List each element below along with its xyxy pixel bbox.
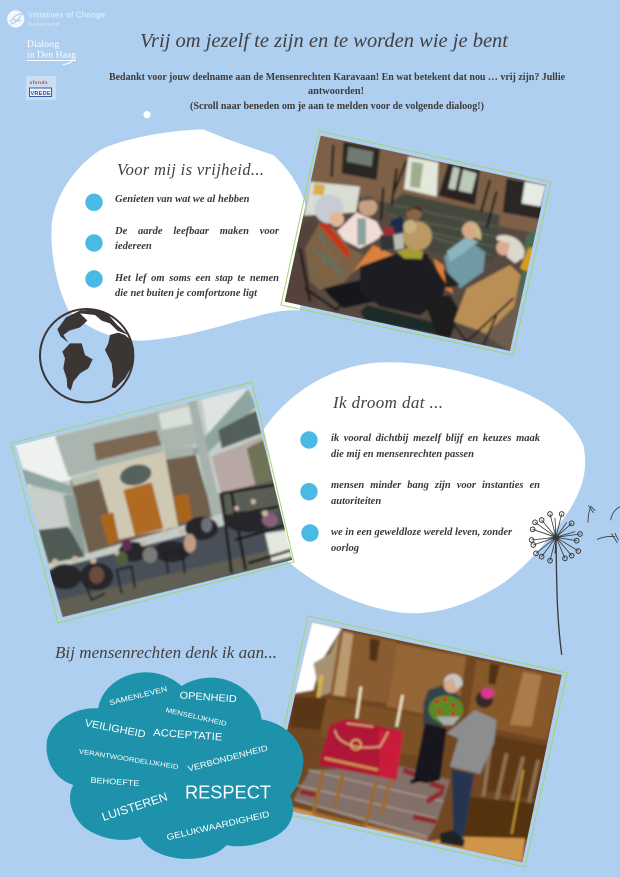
cloud words: ACCEPTATIE [153, 728, 223, 743]
intro text: Bedankt voor jouw deelname aan de Mensenrechten Karavaan! En wat betekent dat nou … vrij zijn? Jullie [109, 72, 566, 83]
cloud words: RESPECT [185, 781, 271, 802]
text block: vrijheid list: die net buiten je comfortzone ligt [115, 288, 257, 299]
intro text: (Scroll naar beneden om je aan te melden voor de volgende dialoog!) [190, 101, 484, 112]
cloud shape [47, 672, 303, 859]
logo: vfonds vrede badge: VREDE [30, 91, 51, 97]
logo: Dialoog in Den Haag: Dialoog [27, 40, 59, 50]
logo: Initiatives of Change: Initiatives of Change [28, 10, 106, 20]
text block: vrijheid list [114, 194, 279, 299]
cloud words: VERANTWOORDELIJKHEID [78, 748, 179, 771]
heading: Voor mij is vrijheid: Voor mij is vrijheid... [117, 160, 264, 179]
word cloud [47, 672, 303, 859]
panel: droom bubble [263, 362, 585, 613]
bullets: vrijheid [85, 194, 103, 288]
icon: globe [40, 309, 134, 402]
icon: dandelion [529, 506, 620, 654]
cloud words: BEHOEFTE [90, 776, 140, 788]
cloud words [78, 684, 271, 842]
text block: vrijheid list: Het lef om soms een stap te nemen [115, 273, 279, 284]
photo: group around a table [280, 125, 553, 358]
text block: droom list: autoriteiten [331, 496, 381, 507]
decorative white dot [143, 111, 151, 118]
logo: vfonds vrede badge [26, 76, 56, 100]
text block: droom list: we in een geweldloze wereld leven, zonder [331, 527, 512, 538]
cloud words: GELUKWAARDIGHEID [166, 809, 270, 842]
text block: droom list: ik vooral dichtbij mezelf blijf en keuzes maak [331, 433, 540, 444]
text block: vrijheid list: iedereen [115, 241, 152, 252]
cloud words: MENSELIJKHEID [165, 707, 227, 728]
intro text [109, 72, 566, 112]
cloud words: OPENHEID [179, 690, 237, 705]
heading: Bij mensenrechten denk ik aan: Bij mensenrechten denk ik aan... [55, 643, 277, 662]
panel: vrijheid bubble [51, 129, 307, 341]
text block: droom list: mensen minder bang zijn voor instanties en [331, 480, 540, 491]
cloud words: SAMENLEVEN [108, 684, 168, 707]
logo: Initiatives of Change [7, 10, 106, 28]
heading: Ik droom dat: Ik droom dat ... [332, 393, 443, 412]
cloud words: VERBONDENHEID [187, 743, 269, 774]
text block: vrijheid list: De aarde leefbaar maken voor [115, 226, 279, 237]
logo: Dialoog in Den Haag [27, 40, 76, 64]
bullets: droom [300, 431, 319, 542]
text block: droom list: oorlog [331, 543, 359, 554]
logo: Dialoog in Den Haag: in Den Haag [27, 50, 76, 60]
title: Vrij om jezelf te zijn en te worden wie je bent [140, 30, 509, 52]
text block: vrijheid list: Genieten van wat we al hebben [115, 194, 249, 205]
cloud words: VEILIGHEID [84, 718, 146, 741]
intro text: antwoorden! [308, 86, 364, 97]
photo: ceremony with flowers [266, 616, 567, 867]
cloud words: LUISTEREN [100, 790, 169, 824]
photo: courtyard with tables [5, 380, 298, 623]
text block: droom list: die mij en mensenrechten passen [331, 449, 474, 460]
logo: Initiatives of Change: Nederland [28, 22, 59, 28]
text block: droom list [331, 433, 540, 554]
logo: vfonds vrede badge: vfonds [30, 80, 48, 86]
